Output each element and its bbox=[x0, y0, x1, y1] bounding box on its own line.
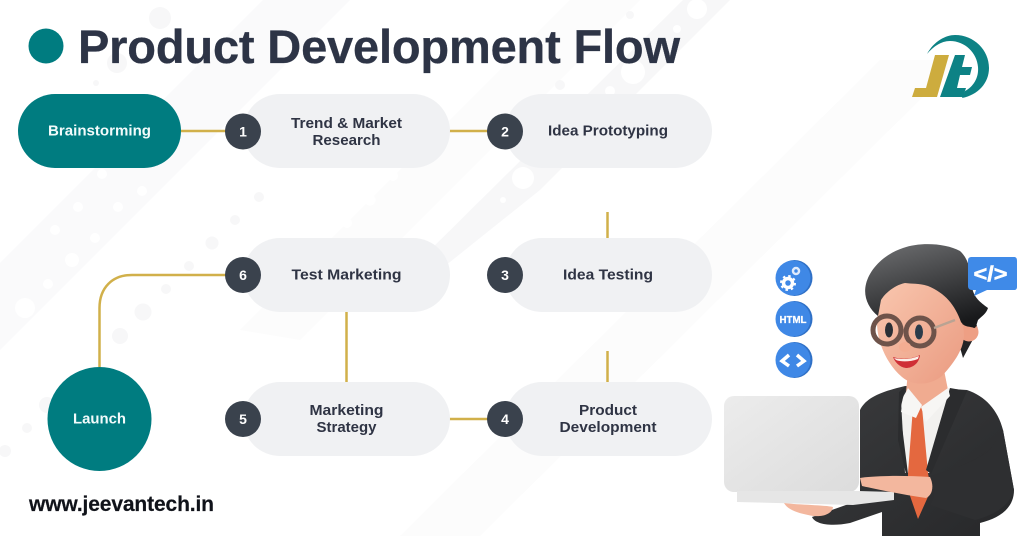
step 6: Test Marketing: 6 bbox=[239, 267, 247, 283]
logo bbox=[912, 35, 989, 98]
hand under laptop bbox=[784, 503, 833, 516]
step 1: Trend and Market Research: Trend & Market bbox=[291, 115, 402, 132]
step 1: Trend and Market Research: 1 bbox=[239, 124, 247, 140]
node: Launch: Launch bbox=[73, 410, 126, 428]
step 4: Product Development: 4 bbox=[501, 411, 509, 427]
step 1: Trend and Market Research bbox=[225, 94, 450, 168]
node: Brainstorming bbox=[18, 94, 181, 168]
icon: HTML badge bbox=[776, 301, 812, 337]
laptop lid bbox=[724, 396, 859, 492]
suit body bbox=[812, 386, 1014, 536]
neck bbox=[906, 370, 948, 408]
step 5: Marketing Strategy: Strategy bbox=[316, 419, 377, 436]
title text: Product Development Flow bbox=[78, 20, 680, 73]
step 4: Product Development: Development bbox=[560, 419, 656, 436]
left lapel bbox=[898, 386, 908, 474]
step 3: Idea Testing: 3 bbox=[501, 267, 509, 283]
step 2: Idea Prototyping: 2 bbox=[501, 124, 509, 140]
icon: gears badge bbox=[776, 260, 812, 296]
step 5: Marketing Strategy: Marketing bbox=[310, 402, 384, 419]
step 5: Marketing Strategy bbox=[225, 382, 450, 456]
glasses bbox=[873, 316, 934, 346]
connector lines bbox=[100, 131, 608, 419]
node: Launch bbox=[48, 367, 152, 471]
step 6: Test Marketing: Test Marketing bbox=[292, 266, 402, 284]
right lapel bbox=[926, 388, 967, 474]
step 3: Idea Testing bbox=[487, 238, 712, 312]
step 5: Marketing Strategy: 5 bbox=[239, 411, 247, 427]
code speech bubble bbox=[968, 257, 1017, 296]
illustration: developer with laptop bbox=[724, 244, 1017, 536]
mouth bbox=[893, 355, 920, 368]
step 2: Idea Prototyping: Idea Prototyping bbox=[548, 122, 668, 140]
hand on keyboard bbox=[860, 476, 932, 498]
hair bbox=[865, 244, 988, 328]
tie bbox=[908, 407, 931, 519]
title bullet bbox=[28, 28, 64, 64]
icon: HTML badge: HTML bbox=[780, 315, 806, 326]
laptop base bbox=[737, 491, 894, 505]
right arm sleeve bbox=[930, 430, 1014, 520]
face bbox=[877, 281, 964, 384]
step 1: Trend and Market Research: Research bbox=[312, 132, 380, 149]
collar bbox=[901, 388, 922, 418]
back hair bbox=[955, 300, 978, 358]
ear bbox=[960, 322, 978, 342]
step 4: Product Development bbox=[487, 382, 712, 456]
step 3: Idea Testing: Idea Testing bbox=[563, 266, 653, 284]
step 2: Idea Prototyping bbox=[487, 94, 712, 168]
step 6: Test Marketing bbox=[225, 238, 450, 312]
website url: www.jeevantech.in bbox=[28, 493, 214, 516]
step 4: Product Development: Product bbox=[579, 402, 637, 419]
title bbox=[28, 20, 680, 73]
shirt bbox=[901, 388, 950, 473]
node: Brainstorming: Brainstorming bbox=[48, 122, 151, 140]
nose bbox=[899, 342, 911, 352]
icon: code badge bbox=[776, 342, 812, 378]
illustration: developer with laptop: </> bbox=[974, 263, 1008, 286]
